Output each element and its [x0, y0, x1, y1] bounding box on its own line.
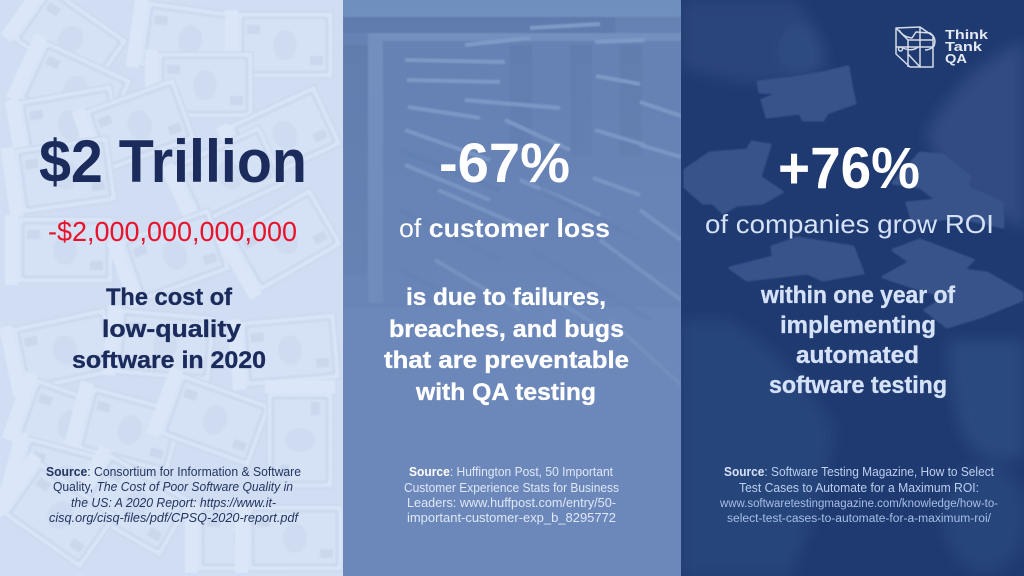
source citation	[46, 465, 301, 525]
icon: cube	[896, 27, 935, 67]
description: software in 2020	[72, 347, 266, 374]
big number: +76%	[778, 136, 920, 201]
big number: -67%	[439, 131, 570, 194]
subheading: of customer loss	[399, 213, 610, 243]
source citation: Leaders: www.huffpost.com/entry/50-	[407, 496, 616, 510]
source citation: important-customer-exp_b_8295772	[407, 511, 616, 525]
description: The cost of	[106, 284, 233, 311]
source citation: Source: Huffington Post, 50 Important	[409, 465, 614, 479]
source citation: Test Cases to Automate for a Maximum ROI:	[739, 481, 979, 495]
source citation	[404, 465, 619, 525]
wordmark: Think	[945, 28, 988, 42]
description	[760, 282, 956, 399]
description	[72, 284, 266, 374]
background: shelves	[343, 0, 681, 385]
description: is due to failures,	[406, 284, 606, 311]
wordmark: Tank	[945, 40, 982, 54]
source citation: Source: Consortium for Information & Software	[46, 465, 301, 479]
description: automated	[796, 342, 919, 369]
source citation: Source: Software Testing Magazine, How to Select	[724, 465, 994, 479]
panel: customer loss	[343, 0, 681, 576]
background: hands	[681, 0, 1024, 576]
description: with QA testing	[415, 379, 596, 406]
description	[384, 284, 629, 406]
background: stacks of dollar bills	[0, 0, 344, 576]
wordmark: QA	[945, 52, 967, 66]
description: breaches, and bugs	[389, 316, 624, 343]
subheading: of companies grow ROI	[705, 209, 994, 239]
full dollar amount: -$2,000,000,000,000	[48, 216, 297, 247]
source citation	[719, 465, 998, 525]
description: implementing	[780, 312, 936, 339]
source citation: www.softwaretestingmagazine.com/knowledge/how-to-	[719, 498, 998, 510]
source citation: select-test-cases-to-automate-for-a-maximum-roi/	[727, 513, 992, 525]
source citation: the US: A 2020 Report: https://www.it-	[71, 496, 276, 510]
source citation: cisq.org/cisq-files/pdf/CPSQ-2020-report.pdf	[49, 511, 300, 525]
source citation: Quality, The Cost of Poor Software Quality in	[53, 480, 293, 494]
background: puzzle pieces	[685, 67, 1022, 327]
panel: companies grow ROI	[681, 0, 1024, 576]
logo: Think Tank QA	[896, 27, 988, 67]
wordmark	[945, 28, 988, 66]
big number: $2 Trillion	[39, 128, 307, 195]
source citation: Customer Experience Stats for Business	[404, 481, 619, 495]
description: within one year of	[760, 282, 956, 309]
description: low-quality	[102, 316, 242, 343]
panel: cost of low-quality software	[0, 0, 344, 576]
description: that are preventable	[384, 347, 629, 374]
description: software testing	[769, 372, 947, 399]
